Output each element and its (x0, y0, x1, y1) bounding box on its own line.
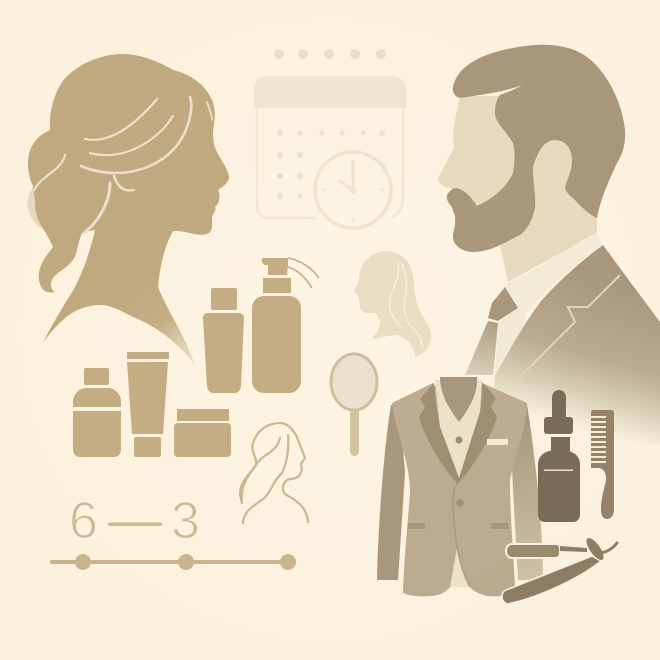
number 6: 6 (69, 492, 98, 550)
dots row (274, 49, 386, 59)
pivot (583, 535, 607, 563)
collar back (440, 377, 477, 422)
center seam (453, 487, 470, 587)
range numbers (69, 492, 200, 550)
calendar outline (257, 108, 403, 218)
hair shadow edge (27, 184, 47, 232)
tube (127, 352, 169, 457)
razor blade (506, 544, 560, 558)
razor handle (502, 556, 601, 604)
jar (174, 409, 231, 457)
dash (108, 522, 162, 526)
man skin (438, 96, 597, 282)
hand mirror (331, 354, 377, 456)
band bottle (73, 368, 121, 457)
man silhouette (438, 45, 660, 445)
right lapel (455, 382, 497, 487)
beard and hair (447, 45, 625, 252)
hair product bottles (73, 258, 319, 457)
beard oil dropper bottle (538, 390, 580, 522)
outlined woman with long hair (240, 423, 308, 523)
calendar with clock (254, 76, 406, 228)
small woman silhouette (354, 251, 431, 357)
pump bottle (252, 258, 319, 393)
hair highlight strands (34, 97, 212, 233)
vest (435, 380, 482, 478)
shirt front (495, 308, 527, 373)
bottom vest gap (450, 548, 470, 587)
left sleeve (377, 405, 405, 580)
lapel line (517, 275, 620, 380)
timeline (50, 554, 296, 570)
calendar date dots (277, 130, 385, 199)
comb (591, 410, 614, 519)
left lapel (419, 383, 459, 483)
man suit (490, 245, 660, 445)
pockets (487, 439, 508, 445)
woman head and shoulders (28, 54, 229, 365)
clock (315, 152, 391, 228)
suit jacket (377, 377, 543, 596)
buttons (456, 436, 462, 444)
man collar (505, 233, 603, 320)
calendar header (254, 76, 406, 108)
number 3: 3 (171, 492, 200, 550)
jacket body (392, 383, 527, 596)
small bottle (203, 288, 244, 393)
right sleeve (512, 405, 543, 580)
woman silhouette (27, 54, 229, 365)
straight razor (502, 535, 617, 604)
tie (465, 287, 518, 375)
